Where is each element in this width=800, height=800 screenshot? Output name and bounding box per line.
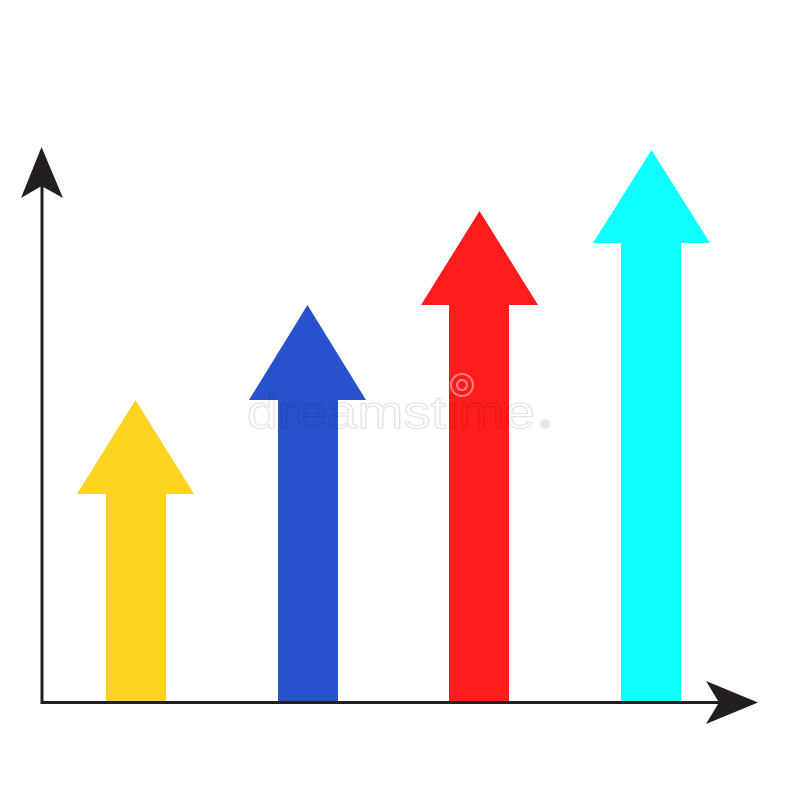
x axis with arrowhead [40,681,758,724]
arrow: red bar [421,211,538,702]
arrow: cyan bar [593,150,710,702]
arrow: blue bar [249,305,366,702]
watermark: dreamstime [247,386,535,438]
y axis with arrowhead [21,147,63,704]
watermark [247,374,550,438]
arrow: yellow bar [77,400,194,702]
